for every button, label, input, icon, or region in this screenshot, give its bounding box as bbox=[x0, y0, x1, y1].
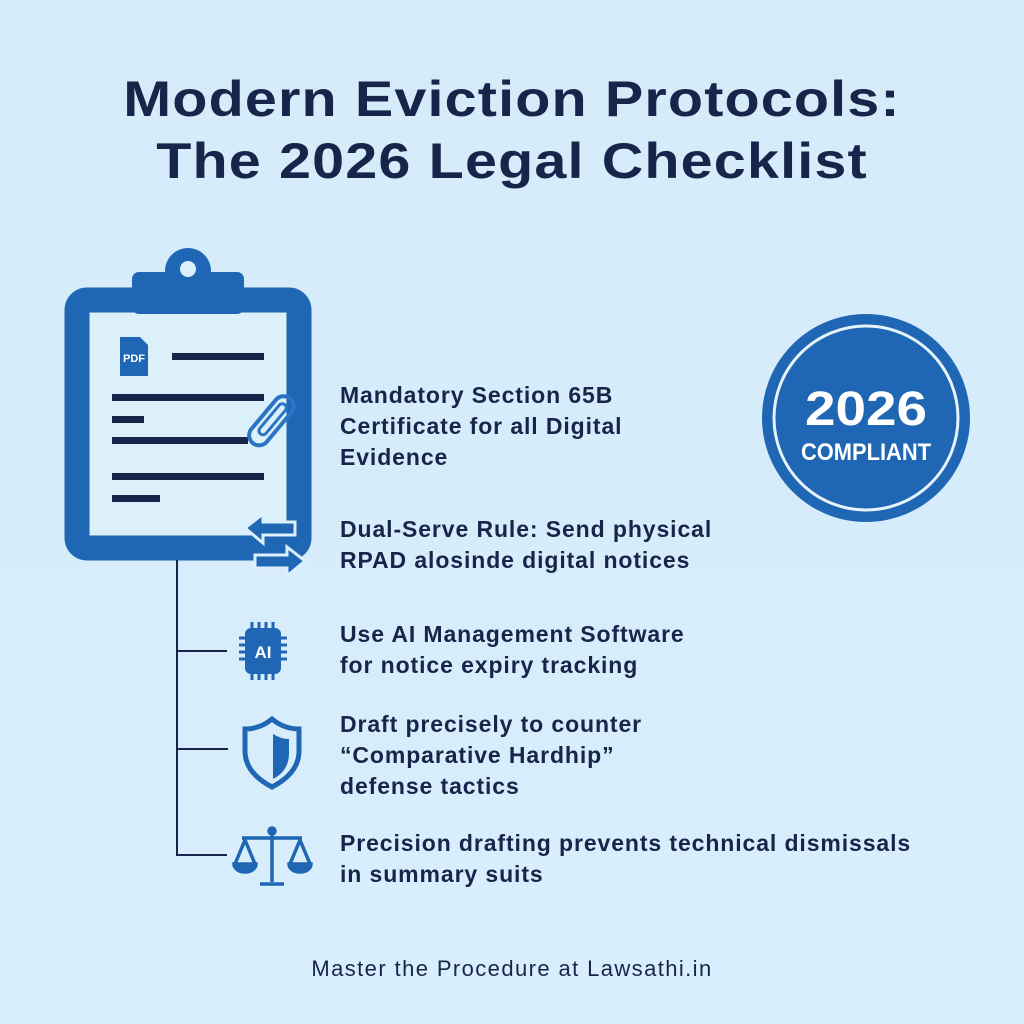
item 2: Dual-Serve Rule: Send physical bbox=[340, 516, 712, 542]
item 1: Evidence bbox=[340, 444, 448, 470]
icon: AI chip bbox=[239, 622, 287, 680]
item 1 bbox=[340, 382, 622, 470]
item 4 bbox=[340, 711, 642, 799]
item 4: defense tactics bbox=[340, 773, 520, 799]
item 1: Mandatory Section 65B bbox=[340, 382, 613, 408]
icon: pdf bbox=[120, 337, 148, 376]
icon: paperclip bbox=[245, 392, 298, 449]
icon: shield bbox=[245, 719, 299, 787]
footer: Master the Procedure at Lawsathi.in bbox=[311, 956, 713, 981]
icon: exchange arrows bbox=[245, 514, 305, 576]
item 4: “Comparative Hardhip” bbox=[340, 742, 615, 768]
item 5: in summary suits bbox=[340, 861, 544, 887]
badge bbox=[762, 314, 970, 522]
item 3: for notice expiry tracking bbox=[340, 652, 638, 678]
badge: COMPLIANT bbox=[801, 439, 931, 466]
item 1: Certificate for all Digital bbox=[340, 413, 622, 439]
title: Modern Eviction Protocols: bbox=[123, 71, 901, 127]
title bbox=[123, 71, 901, 189]
badge: 2026 bbox=[805, 383, 927, 436]
clipboard bbox=[77, 248, 299, 548]
item 2 bbox=[340, 516, 712, 573]
item 5 bbox=[340, 830, 911, 887]
icon: pdf: PDF bbox=[123, 353, 145, 365]
item 5: Precision drafting prevents technical dismissals bbox=[340, 830, 911, 856]
item 3: Use AI Management Software bbox=[340, 621, 685, 647]
title: The 2026 Legal Checklist bbox=[156, 133, 868, 189]
item 2: RPAD alosinde digital notices bbox=[340, 547, 690, 573]
timeline line bbox=[177, 560, 228, 855]
icon: scales bbox=[234, 828, 311, 884]
icon: AI chip: AI bbox=[254, 643, 272, 662]
item 3 bbox=[340, 621, 685, 678]
item 4: Draft precisely to counter bbox=[340, 711, 642, 737]
